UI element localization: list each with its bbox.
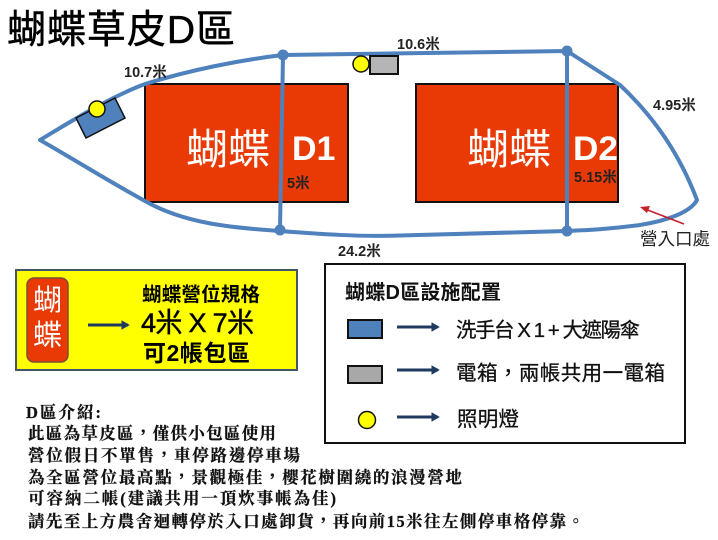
label: 4.95米: 4.95米 <box>653 97 696 114</box>
icon: campsite swatch <box>27 278 68 362</box>
arrow <box>88 324 128 326</box>
spec heading: 蝴蝶營位規格 <box>142 283 260 306</box>
label: 24.2米: 24.2米 <box>338 243 381 260</box>
label: entrance: 營入口處 <box>640 229 710 249</box>
arrow: entrance <box>640 206 684 224</box>
label: 10.6米: 10.6米 <box>397 36 440 53</box>
icon: power box <box>370 56 398 74</box>
legend: light <box>358 408 519 431</box>
panel: campsite D1: 蝴蝶 <box>186 126 270 173</box>
spec size: 4米 X 7米 <box>141 308 254 338</box>
boundary nodes <box>274 46 572 236</box>
text block: zone introduction: 為全區營位最高點，景觀極佳，櫻花樹圍繞的浪漫營地 <box>28 467 462 487</box>
legend: power box <box>348 362 665 385</box>
site plan <box>40 36 710 260</box>
divider: D1 width line <box>280 55 283 230</box>
icon: light top <box>353 56 369 72</box>
label: 10.7米: 10.7米 <box>124 64 167 81</box>
legend: light: 照明燈 <box>457 408 519 431</box>
site boundary <box>40 51 697 236</box>
legend: wash station <box>348 319 640 342</box>
panel: campsite D2: D2 <box>573 130 618 168</box>
panel: campsite D2 <box>416 84 618 202</box>
text block: zone introduction: D區介紹: <box>26 402 101 422</box>
icon: campsite swatch: 蝶 <box>33 319 62 352</box>
legend: power box: 電箱，兩帳共用一電箱 <box>456 362 665 385</box>
panel: campsite spec <box>16 270 297 370</box>
panel: campsite D1: D1 <box>292 130 335 168</box>
text block: zone introduction: 可容納二帳(建議共用一頂炊事帳為佳) <box>28 488 336 508</box>
text block: zone introduction: 營位假日不單售，車停路邊停車場 <box>28 445 300 465</box>
panel: campsite D2: 蝴蝶 <box>467 126 551 173</box>
legend heading: 蝴蝶D區設施配置 <box>345 281 501 304</box>
spec capacity: 可2帳包區 <box>143 340 250 366</box>
text block: zone introduction: 請先至上方農舍迴轉停於入口處卸貨，再向前15米往左側停車格停靠。 <box>28 511 584 531</box>
title: 蝴蝶草皮D區 <box>7 9 235 52</box>
icon: wash station <box>76 98 125 138</box>
icon: campsite swatch: 蝴 <box>33 284 62 317</box>
text block: zone introduction: 此區為草皮區，僅供小包區使用 <box>28 423 276 443</box>
icon: light left <box>89 101 105 117</box>
label: 5米: 5米 <box>287 175 310 192</box>
divider: D2 width line <box>565 51 569 231</box>
panel: facilities legend <box>325 264 685 443</box>
legend: wash station: 洗手台 X 1 + 大遮陽傘 <box>456 319 640 342</box>
panel: campsite D1 <box>145 84 348 202</box>
label: 5.15米: 5.15米 <box>574 169 617 186</box>
text block: zone introduction <box>26 402 584 531</box>
